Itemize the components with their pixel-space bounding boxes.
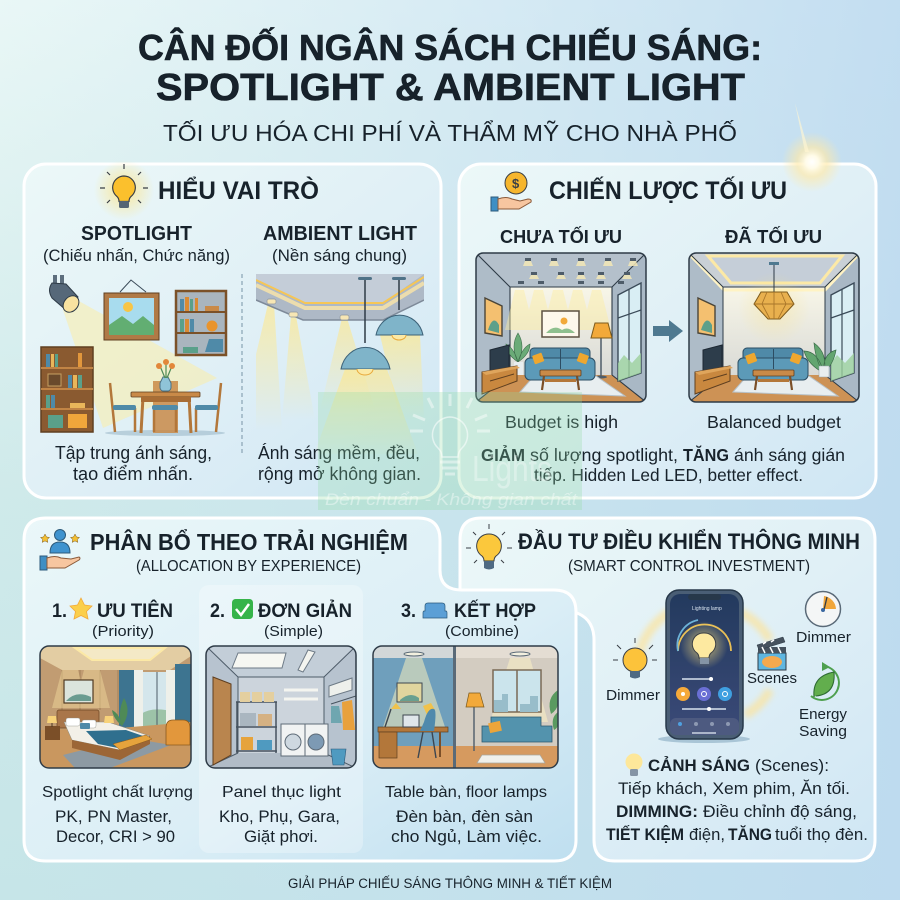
- column text: cho Ngủ, Làm việc.: [391, 828, 542, 846]
- column 2: đơn giản: [206, 599, 356, 846]
- column text: Đèn bàn, đèn sàn: [396, 808, 533, 826]
- sub heading: (ALLOCATION BY EXPERIENCE): [136, 558, 361, 575]
- column title: ƯU TIÊN: [97, 600, 173, 622]
- column title: [52, 598, 173, 622]
- before label: CHƯA TỐI ƯU: [500, 226, 622, 247]
- illustration: ambient lighting scene: [256, 274, 424, 450]
- icon: energy saving leaf: [811, 662, 839, 700]
- smart control description: (Scenes):: [755, 756, 829, 775]
- bookcase: [41, 347, 93, 432]
- watermark: [318, 392, 582, 510]
- icon: people in hand with stars: [40, 530, 80, 570]
- label: scenes: Scenes: [747, 671, 797, 687]
- smart control description: Điều chỉnh độ sáng,: [703, 802, 857, 821]
- panel: chiến lược tối ưu: [459, 164, 876, 498]
- caption: ambient: Ánh sáng mềm, đều,: [258, 443, 420, 463]
- column title: 3.: [401, 601, 416, 622]
- smart control description: CẢNH SÁNG: [648, 756, 750, 775]
- spotlight label: SPOTLIGHT: [81, 223, 192, 245]
- strategy description: tiếp. Hidden Led LED, better effect.: [534, 465, 803, 485]
- title line 1: CÂN ĐỐI NGÂN SÁCH CHIẾU SÁNG:: [138, 26, 762, 68]
- column sublabel: (Priority): [92, 623, 154, 640]
- sun flare: [782, 103, 842, 192]
- strategy description: ánh sáng gián: [734, 445, 845, 465]
- title line 2: SPOTLIGHT & AMBIENT LIGHT: [156, 67, 745, 109]
- icon: light bulb heading: [94, 160, 154, 220]
- caption: spotlight: Tập trung ánh sáng,: [55, 443, 212, 463]
- illustration: spotlight scene: [41, 275, 226, 436]
- column title: [210, 599, 352, 622]
- illustration: bedroom: [40, 646, 191, 768]
- column text: Decor, CRI > 90: [56, 828, 175, 846]
- strategy description: TĂNG: [683, 444, 729, 465]
- sub heading: (SMART CONTROL INVESTMENT): [568, 558, 810, 575]
- icon: dimmer gauge: [806, 592, 840, 626]
- spotlight sublabel: (Chiếu nhấn, Chức năng): [43, 247, 230, 265]
- caption: ambient: rộng mở không gian.: [258, 464, 421, 484]
- before caption: Budget is high: [505, 412, 618, 432]
- icon: clapperboard: [757, 637, 786, 670]
- wall picture: [104, 280, 159, 340]
- pendant lamp back: [376, 277, 423, 340]
- icon: small bulb: [626, 754, 642, 776]
- smart control description: TIẾT KIỆM: [606, 825, 684, 844]
- column text: Table bàn, floor lamps: [385, 784, 547, 801]
- smart control description: TĂNG: [728, 825, 772, 844]
- smart control description: điện,: [689, 825, 725, 844]
- watermark: Lights: [472, 448, 552, 489]
- label: energy saving: Energy: [799, 707, 848, 723]
- caption: spotlight: tạo điểm nhấn.: [73, 464, 193, 484]
- highlighted middle column: [199, 585, 363, 853]
- column title: KẾT HỢP: [454, 600, 536, 622]
- heading: HIỂU VAI TRÒ: [158, 175, 319, 205]
- column text: PK, PN Master,: [55, 808, 172, 826]
- strategy description: GIẢM: [481, 444, 525, 465]
- icon: track spotlight: [50, 275, 82, 315]
- illustration: room before: [476, 253, 646, 402]
- column sublabel: (Simple): [264, 623, 323, 640]
- column text: Panel thục light: [222, 784, 342, 801]
- label: energy saving: [799, 707, 848, 740]
- label: dimmer: Dimmer: [606, 688, 660, 704]
- icon: coin in hand: $: [512, 176, 520, 191]
- after caption: Balanced budget: [707, 412, 841, 432]
- title block: [138, 26, 762, 146]
- ambient label: AMBIENT LIGHT: [263, 223, 417, 245]
- watermark: Đèn chuẩn - Không gian chất: [325, 490, 578, 509]
- smart control description: [606, 754, 868, 844]
- column title: 2.: [210, 601, 225, 622]
- heading: CHIẾN LƯỢC TỐI ƯU: [549, 175, 787, 205]
- column text: [219, 784, 342, 846]
- illustration: utility room: [206, 646, 356, 768]
- wall shelf: [176, 291, 226, 355]
- caption: spotlight: [55, 443, 212, 484]
- pendant lamp front: [341, 277, 390, 375]
- phone illustration: Lighting lamp: [692, 606, 722, 612]
- icon: coin in hand: [491, 172, 531, 211]
- arrow: [653, 320, 683, 342]
- column text: Giặt phơi.: [244, 828, 318, 846]
- phone glow arcs: [637, 612, 770, 715]
- column title: ĐƠN GIẢN: [258, 600, 352, 622]
- strategy description: số lượng spotlight,: [530, 445, 678, 465]
- column title: 1.: [52, 601, 67, 622]
- dining set: [105, 359, 225, 436]
- column text: [385, 784, 547, 846]
- phone illustration: [658, 590, 750, 743]
- after label: ĐÃ TỐI ƯU: [725, 226, 822, 247]
- footer: GIẢI PHÁP CHIẾU SÁNG THÔNG MINH & TIẾT KIỆM: [288, 876, 612, 891]
- illustration: room after: [689, 253, 859, 402]
- panel: phân bổ theo trải nghiệm: [24, 518, 576, 861]
- icon: bulb: [466, 524, 512, 570]
- subtitle: TỐI ƯU HÓA CHI PHÍ VÀ THẨM MỸ CHO NHÀ PHỐ: [163, 119, 737, 146]
- heading: ĐẦU TƯ ĐIỀU KHIỂN THÔNG MINH: [518, 529, 860, 554]
- label: dimmer gauge: Dimmer: [796, 630, 851, 646]
- column 3: kết hợp: [373, 600, 558, 846]
- column 1: ưu tiên: [40, 598, 193, 846]
- strategy description: [481, 444, 845, 485]
- column text: [42, 784, 193, 846]
- column text: Kho, Phụ, Gara,: [219, 808, 340, 826]
- panel: hiểu vai trò: [24, 160, 441, 498]
- illustration: study and living room: [373, 646, 558, 768]
- icon: dimmer bulb: [613, 638, 657, 678]
- ambient sublabel: (Nền sáng chung): [272, 247, 407, 265]
- column sublabel: (Combine): [445, 623, 519, 640]
- smart control description: tuổi thọ đèn.: [775, 825, 868, 844]
- heading: PHÂN BỔ THEO TRẢI NGHIỆM: [90, 527, 408, 555]
- smart control description: Tiếp khách, Xem phim, Ăn tối.: [618, 779, 850, 798]
- column text: Spotlight chất lượng: [42, 784, 193, 801]
- column title: [401, 600, 536, 622]
- label: energy saving: Saving: [799, 724, 847, 740]
- caption: ambient: [258, 443, 421, 484]
- smart control description: DIMMING:: [616, 802, 698, 821]
- panel: đầu tư điều khiển thông minh: [460, 518, 875, 861]
